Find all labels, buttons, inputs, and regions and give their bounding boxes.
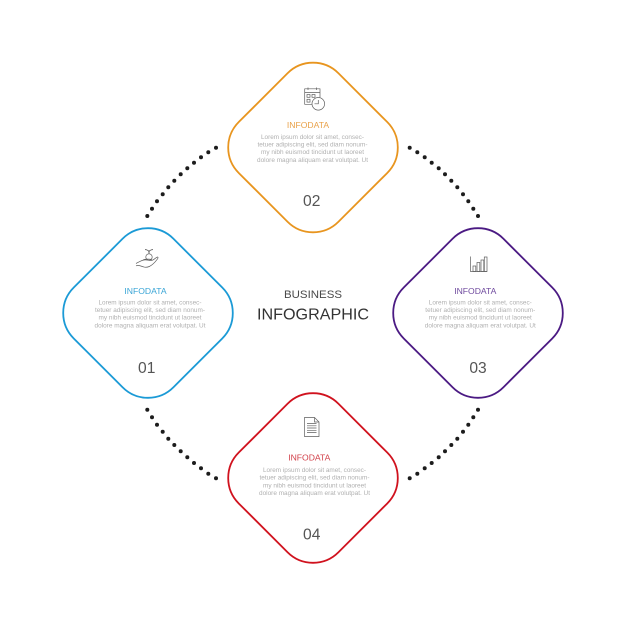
text block: Lorem ipsum dolor sit amet, consec-: [98, 300, 202, 306]
title: business infographic: BUSINESS: [284, 289, 342, 301]
panel: 03 purple: [378, 213, 578, 413]
text block: tetuer adipiscing elit, sed diam nonum-: [95, 307, 205, 314]
dotted arc: top left: [145, 146, 218, 218]
dotted arc: bottom left: [145, 408, 218, 480]
title: business infographic: [257, 289, 369, 324]
heading: INFODATA: [288, 453, 331, 463]
title: business infographic: INFOGRAPHIC: [257, 306, 369, 324]
text block: [257, 134, 368, 164]
text block: dolore magna aliquam erat volutpat. Ut: [257, 157, 368, 164]
text block: [425, 300, 536, 330]
panel: 01 blue: [48, 213, 248, 413]
text block: dolore magna aliquam erat volutpat. Ut: [94, 322, 206, 330]
icon: document: [304, 418, 319, 436]
heading: INFODATA: [454, 286, 497, 296]
heading: INFODATA: [287, 120, 329, 130]
text block: my nibh euismod tincidunt ut laoreet: [98, 314, 202, 322]
icon: hand holding coin and sprout: [136, 250, 158, 267]
number: 01: [138, 360, 155, 377]
text block: tetuer adipiscing elit, sed diam nonum-: [260, 475, 370, 482]
text block: Lorem ipsum dolor sit amet, consec-: [263, 467, 366, 474]
text block: tetuer adipiscing elit, sed diam nonum-: [425, 307, 535, 314]
text block: my nibh euismod tincidunt ut laoreet: [261, 149, 364, 156]
text block: my nibh euismod tincidunt ut laoreet: [429, 314, 532, 322]
text block: Lorem ipsum dolor sit amet, consec-: [429, 300, 532, 306]
text block: dolore magna aliquam erat volutpat. Ut: [259, 490, 370, 497]
dotted arc: bottom right: [408, 408, 480, 480]
dotted arc: top right: [408, 146, 480, 218]
text block: my nibh euismod tincidunt ut laoreet: [263, 482, 366, 489]
icon: calendar with clock: [305, 88, 325, 110]
number: 02: [303, 193, 320, 210]
panel: 04 red: [213, 378, 413, 578]
text block: [259, 467, 370, 497]
heading: INFODATA: [124, 286, 167, 296]
panel: 02 orange: [213, 48, 413, 247]
number: 03: [469, 360, 487, 377]
number: 04: [303, 526, 321, 543]
icon: bar chart: [470, 256, 487, 272]
text block: dolore magna aliquam erat volutpat. Ut: [425, 322, 536, 330]
text block: tetuer adipiscing elit, sed diam nonum-: [258, 142, 368, 149]
text block: Lorem ipsum dolor sit amet, consec-: [261, 134, 364, 141]
text block: [94, 300, 206, 330]
